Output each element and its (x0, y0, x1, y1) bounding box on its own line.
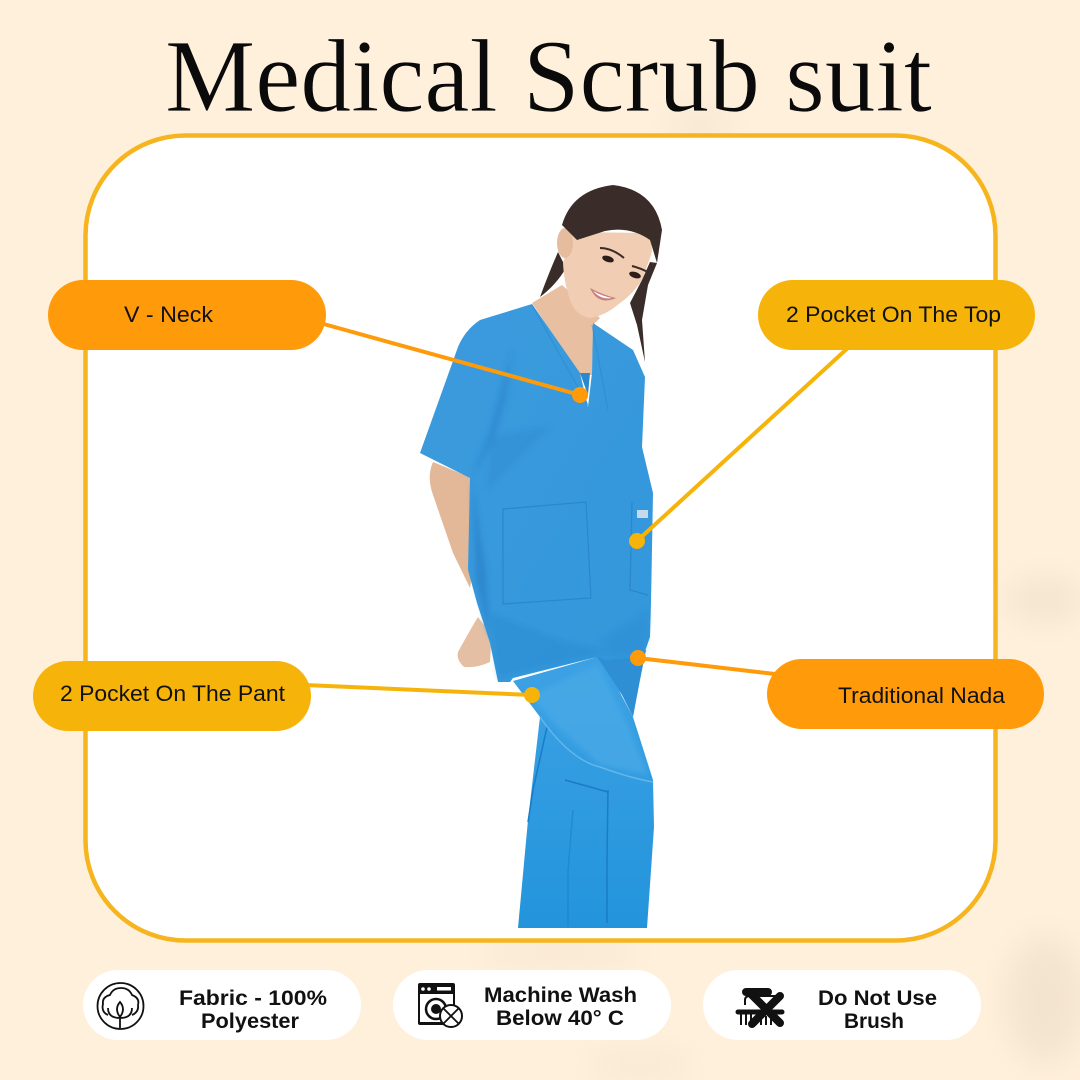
care pill: fabric: Fabric - 100% (179, 987, 327, 1010)
callout: 2 Pocket On The Top (758, 280, 1035, 350)
ear (557, 228, 573, 258)
callout: 2 Pocket On The Pant: 2 Pocket On The Pant (60, 681, 285, 706)
undershirt at neckline (580, 373, 590, 395)
care pill: fabric (83, 970, 361, 1040)
back hair and ponytail (540, 252, 657, 362)
shirt (420, 304, 653, 682)
front pockets (503, 502, 648, 604)
background soft shadows (480, 113, 1080, 1075)
callout: V-Neck (48, 280, 326, 350)
collar band (532, 305, 608, 410)
callout: Traditional Nada (767, 659, 1044, 729)
callout line: top pocket (629, 346, 850, 549)
pocket label (637, 510, 648, 518)
callout line: V-neck (320, 323, 588, 403)
callout: Traditional Nada: Traditional Nada (838, 683, 1006, 708)
care pill: brush: Do Not Use (818, 987, 937, 1010)
figure: woman in blue scrub suit (420, 185, 662, 928)
care pill: brush: Brush (844, 1010, 904, 1033)
neck (532, 285, 600, 375)
callout line: traditional nada (630, 650, 775, 674)
care pill: wash: Machine Wash (484, 984, 637, 1007)
trousers (513, 657, 654, 928)
callout: 2 Pocket On The Pant (33, 661, 311, 731)
callout line: pant pocket (305, 685, 540, 703)
arm (430, 462, 474, 588)
icon: washing machine crossed (418, 983, 462, 1027)
callout: V-Neck: V - Neck (124, 302, 214, 327)
shirt shading (472, 345, 650, 678)
back trouser leg (590, 650, 646, 717)
hand (458, 617, 491, 667)
care pill: fabric: Polyester (201, 1010, 299, 1033)
callout: 2 Pocket On The Top: 2 Pocket On The Top (786, 302, 1001, 327)
hair (562, 185, 662, 263)
trouser highlight and folds (528, 665, 653, 927)
eyes (601, 254, 642, 280)
care pill: wash (393, 970, 671, 1040)
face (563, 232, 652, 318)
care pill: brush (703, 970, 981, 1040)
icon: crossed-out brush (738, 992, 782, 1025)
icon: cotton boll (98, 983, 144, 1029)
smile (590, 288, 616, 300)
care pill: wash: Below 40° C (496, 1007, 624, 1030)
eyebrows (600, 248, 648, 272)
panel: product card (86, 136, 996, 940)
title: Medical Scrub suit (165, 19, 932, 134)
